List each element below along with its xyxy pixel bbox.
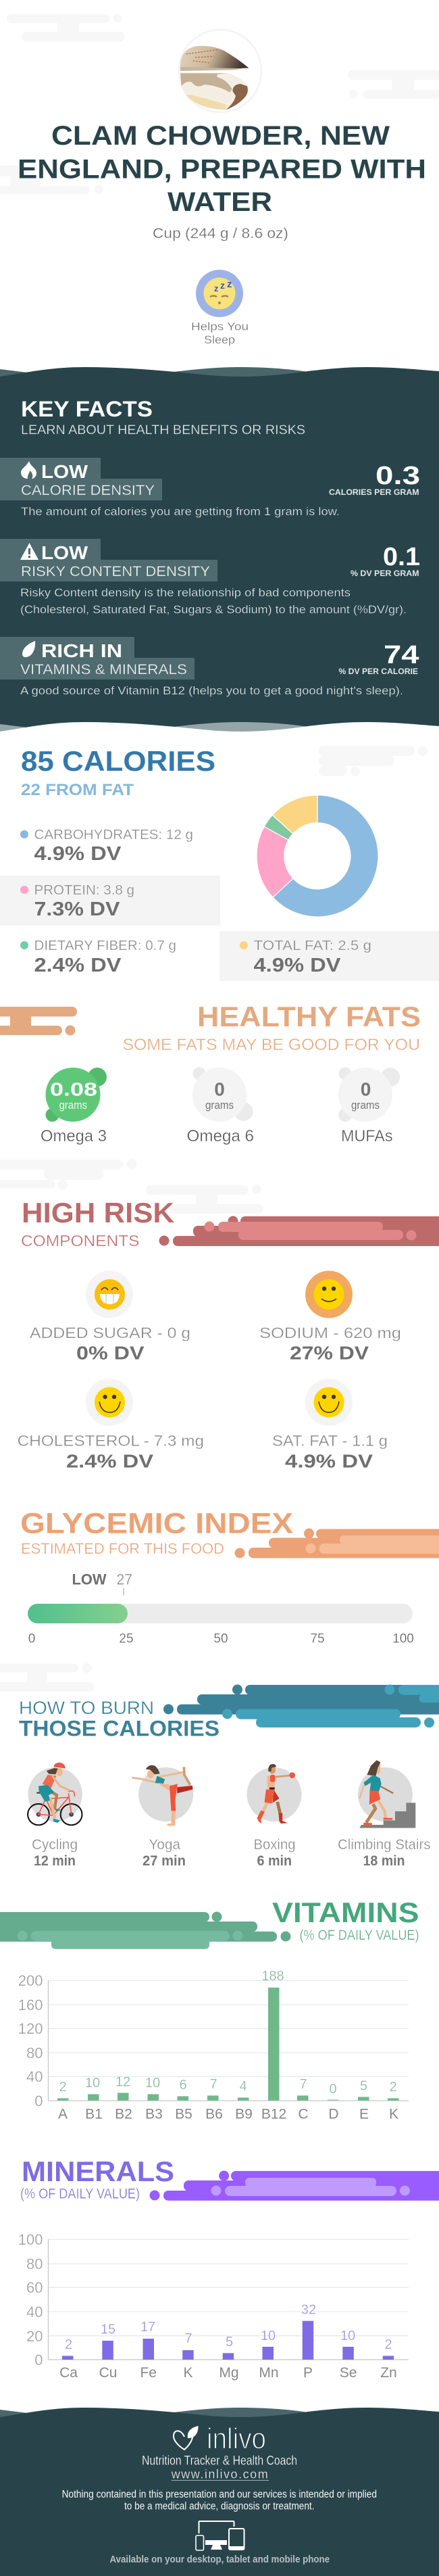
panel: footer <box>0 2408 439 2576</box>
icon: sleep face: z <box>214 283 219 293</box>
title: WATER <box>167 187 272 217</box>
bar chart: minerals: 2 <box>65 2337 72 2352</box>
caption: Climbing Stairs <box>338 1837 431 1853</box>
fact: rich in vitamins and minerals: A good source of Vitamin B12 (helps you to get a good night's sleep). <box>20 685 403 697</box>
heading: MINERALS <box>22 2155 174 2187</box>
availability note: Available on your desktop, tablet and mobile phone <box>109 2554 330 2565</box>
subheading: 22 FROM FAT <box>21 781 134 799</box>
bar chart: vitamins: B9 <box>235 2106 253 2122</box>
macro: total fat <box>220 931 439 981</box>
fact: risky content density: Risky Content density is the relationship of bad components <box>20 587 351 599</box>
gauge: 25 <box>119 1632 134 1646</box>
bar chart: minerals: Se <box>340 2365 357 2381</box>
disclaimer <box>62 2489 377 2512</box>
bar chart: minerals: Mg <box>219 2365 239 2381</box>
item: cholesterol: 2.4% DV <box>66 1451 153 1472</box>
bar chart: vitamins: 80 <box>26 2045 43 2061</box>
macro: dietary fiber: 2.4% DV <box>34 955 122 976</box>
gauge: LOW <box>72 1571 107 1588</box>
bar chart: minerals: Cu <box>99 2365 117 2381</box>
bar chart: vitamins: C <box>298 2106 309 2122</box>
activity: cycling: 12 min <box>34 1853 76 1869</box>
stat: omega 3 <box>41 1068 107 1145</box>
heading: KEY FACTS <box>21 397 153 421</box>
decoration <box>235 1528 439 1558</box>
activity: cycling <box>28 1763 82 1869</box>
fact: rich in vitamins and minerals: % DV PER CALORIE <box>339 667 418 676</box>
heading: HEALTHY FATS <box>197 1001 421 1032</box>
title: ENGLAND, PREPARED WITH <box>18 154 426 184</box>
gauge: 100 <box>392 1632 414 1646</box>
icon: leaf <box>22 641 35 657</box>
fact: calorie density: CALORIES PER GRAM <box>329 487 419 497</box>
panel: glycemic index <box>20 1508 439 1646</box>
macro: dietary fiber <box>20 938 176 976</box>
decoration <box>0 1007 77 1036</box>
bar chart: vitamins: B2 <box>115 2106 132 2122</box>
item: added sugar <box>30 1271 190 1363</box>
fact: calorie density: LOW <box>41 461 88 482</box>
bar chart: vitamins: 40 <box>26 2068 43 2085</box>
decoration <box>0 1912 290 1949</box>
serving size: Cup (244 g / 8.6 oz) <box>153 226 288 241</box>
icon: stair climber <box>358 1760 415 1828</box>
food image: clam <box>179 30 261 112</box>
activity: climbing stairs <box>338 1760 431 1869</box>
item: saturated fat: SAT. FAT - 1.1 g <box>272 1433 388 1450</box>
panel: high risk components <box>0 1159 439 1472</box>
item: cholesterol <box>18 1379 204 1472</box>
bar chart: vitamins: 200 <box>18 1972 43 1989</box>
gauge <box>28 1571 414 1646</box>
bar chart: minerals: 20 <box>26 2328 43 2345</box>
stat: omega 3: grams <box>59 1099 87 1112</box>
item: saturated fat: 4.9% DV <box>285 1451 373 1472</box>
bar chart: minerals: K <box>183 2365 193 2381</box>
stat: omega 3: Omega 3 <box>41 1127 107 1145</box>
title: CLAM CHOWDER, NEW <box>51 121 390 151</box>
bar chart: vitamins: B12 <box>261 2106 286 2122</box>
icon: smile orange <box>305 1271 353 1318</box>
bar chart: vitamins: B6 <box>205 2106 223 2122</box>
fact: calorie density: CALORIE DENSITY <box>21 483 155 498</box>
bar chart: vitamins: 2 <box>389 2080 397 2095</box>
macro: protein: PROTEIN: 3.8 g <box>34 883 134 898</box>
icon: sleep face: z <box>220 280 225 291</box>
bar chart: vitamins: D <box>328 2106 339 2122</box>
icon: sleep face <box>196 270 243 317</box>
icon: cyclist <box>28 1763 82 1825</box>
fact: rich in vitamins and minerals <box>0 637 419 697</box>
item: saturated fat <box>272 1379 388 1472</box>
bar chart: minerals: Ca <box>59 2365 78 2381</box>
bar chart: vitamins: B1 <box>85 2106 103 2122</box>
bar chart: minerals: 5 <box>226 2335 233 2350</box>
logo <box>174 2423 266 2456</box>
caption: Yoga <box>149 1837 180 1853</box>
bar chart: minerals: 17 <box>140 2320 155 2335</box>
fact: risky content density: % DV PER GRAM <box>351 569 419 578</box>
macro: carbohydrates: CARBOHYDRATES: 12 g <box>34 828 193 842</box>
disclaimer: Nothing contained in this presentation and our services is intended or implied <box>62 2489 377 2500</box>
macro: protein: 7.3% DV <box>34 899 120 920</box>
decoration <box>163 1685 439 1727</box>
subheading: (% OF DAILY VALUE) <box>300 1928 419 1943</box>
panel: healthy fats <box>0 1001 421 1145</box>
logo: inlivo <box>207 2423 266 2456</box>
gauge: 0 <box>28 1632 35 1646</box>
bar chart: minerals: Fe <box>140 2365 157 2381</box>
donut chart <box>257 795 378 917</box>
website: www.inlivo.com <box>171 2468 268 2481</box>
bar chart: vitamins: 2 <box>59 2080 67 2095</box>
macro: carbohydrates: 4.9% DV <box>34 843 122 865</box>
fact: risky content density <box>0 539 420 616</box>
fact: risky content density: LOW <box>41 542 88 563</box>
bar chart: vitamins: 188 <box>261 1969 284 1984</box>
stat: mufas: MUFAs <box>341 1127 393 1145</box>
gauge: 27 <box>116 1571 132 1588</box>
macro: carbohydrates <box>20 828 193 865</box>
caption: Cycling <box>32 1837 78 1853</box>
heading: 85 CALORIES <box>21 745 215 777</box>
macro: protein <box>0 876 220 926</box>
panel: calories <box>0 745 439 981</box>
stat: omega 6: Omega 6 <box>186 1127 254 1145</box>
stat: omega 6 <box>186 1067 254 1145</box>
decoration <box>150 2170 439 2201</box>
panel: key facts <box>0 367 439 740</box>
bar chart: minerals: 10 <box>340 2329 355 2343</box>
caption: Boxing <box>254 1837 296 1853</box>
fact: risky content density: 0.1 <box>383 543 420 571</box>
tagline: Nutrition Tracker & Health Coach <box>142 2454 297 2468</box>
stat: omega 6: 0 <box>214 1079 225 1099</box>
bar chart: vitamins: E <box>359 2106 369 2122</box>
heading <box>19 1698 220 1741</box>
stat: mufas <box>338 1067 400 1145</box>
decoration <box>159 1216 439 1246</box>
activity: climbing stairs: 18 min <box>363 1853 405 1869</box>
header section <box>0 14 439 346</box>
item: sodium: 27% DV <box>290 1343 369 1363</box>
gauge: 50 <box>213 1632 228 1646</box>
macro: total fat: 4.9% DV <box>254 955 341 976</box>
bar chart: minerals: 80 <box>26 2256 43 2272</box>
stat: omega 3: 0.08 <box>50 1079 97 1099</box>
stat: mufas: grams <box>351 1099 380 1112</box>
activity: boxing <box>247 1764 302 1869</box>
bar chart: minerals: 7 <box>184 2331 192 2346</box>
fact: calorie density: The amount of calories you are getting from 1 gram is low. <box>21 506 340 518</box>
fact: risky content density: (Cholesterol, Saturated Fat, Sugars & Sodium) to the amount (%DV/gr). <box>20 604 407 616</box>
macro: dietary fiber: DIETARY FIBER: 0.7 g <box>34 938 176 953</box>
stat: mufas: 0 <box>361 1079 371 1099</box>
bar chart: vitamins: 120 <box>18 2020 43 2037</box>
item: added sugar: 0% DV <box>76 1343 145 1363</box>
bar chart: minerals: 40 <box>26 2304 43 2320</box>
icon: boxer <box>247 1764 302 1823</box>
benefit label: Sleep <box>204 333 235 346</box>
panel: vitamins <box>0 1897 419 2122</box>
item: cholesterol: CHOLESTEROL - 7.3 mg <box>18 1433 204 1450</box>
panel: minerals <box>18 2155 439 2381</box>
bar chart: vitamins: 7 <box>299 2077 307 2092</box>
item: sodium <box>259 1271 401 1363</box>
fact: calorie density: 0.3 <box>376 462 420 490</box>
bar chart: minerals: 100 <box>18 2231 43 2248</box>
fact: calorie density <box>0 458 420 518</box>
bar chart: vitamins: K <box>389 2106 398 2122</box>
bar chart: vitamins: 10 <box>145 2076 160 2091</box>
fact: risky content density: RISKY CONTENT DENSITY <box>21 564 210 579</box>
bar chart: minerals: P <box>303 2365 313 2381</box>
heading: THOSE CALORIES <box>19 1717 220 1741</box>
bar chart: vitamins: 12 <box>115 2075 130 2090</box>
activity: yoga <box>132 1765 193 1869</box>
subheading: COMPONENTS <box>21 1232 139 1249</box>
subheading: (% OF DAILY VALUE) <box>20 2187 140 2202</box>
bar chart: vitamins: B5 <box>175 2106 192 2122</box>
fact: rich in vitamins and minerals: RICH IN <box>41 640 122 661</box>
bar chart: vitamins: 4 <box>239 2079 247 2094</box>
activity: boxing: 6 min <box>257 1853 292 1869</box>
bar chart: vitamins: 0 <box>34 2093 43 2109</box>
icon: flame <box>21 461 36 479</box>
item: added sugar: ADDED SUGAR - 0 g <box>30 1325 190 1341</box>
bar chart: vitamins <box>18 1969 409 2122</box>
icon: warning triangle <box>20 543 38 560</box>
heading: HOW TO BURN <box>19 1698 154 1718</box>
subheading: ESTIMATED FOR THIS FOOD <box>21 1540 224 1557</box>
icon: devices <box>196 2521 244 2550</box>
bar chart: minerals: 60 <box>26 2279 43 2296</box>
icon: smile <box>305 1379 353 1426</box>
bar chart: vitamins: 5 <box>360 2079 367 2094</box>
fact: rich in vitamins and minerals: VITAMINS & MINERALS <box>20 662 187 677</box>
item: sodium: SODIUM - 620 mg <box>259 1325 401 1341</box>
subheading: SOME FATS MAY BE GOOD FOR YOU <box>123 1036 420 1054</box>
bar chart: vitamins: 10 <box>85 2076 100 2091</box>
icon: sleep face: z <box>227 279 232 290</box>
heading: HIGH RISK <box>22 1197 174 1229</box>
heading: VITAMINS <box>272 1897 419 1928</box>
fact: rich in vitamins and minerals: 74 <box>384 641 419 669</box>
bar chart: vitamins: 6 <box>179 2078 187 2093</box>
heading: GLYCEMIC INDEX <box>20 1508 293 1540</box>
bar chart: vitamins: 0 <box>329 2082 337 2097</box>
icon: yoga pose <box>132 1765 193 1826</box>
bar chart: minerals: Mn <box>259 2365 279 2381</box>
stat: omega 6: grams <box>205 1099 234 1112</box>
bar chart: minerals: Zn <box>380 2365 397 2381</box>
benefit label: Helps You <box>191 320 249 333</box>
bar chart: vitamins: 7 <box>209 2077 217 2092</box>
bar chart: vitamins: 160 <box>18 1997 43 2013</box>
activity: yoga: 27 min <box>143 1853 186 1869</box>
bar chart: minerals: 2 <box>384 2337 392 2352</box>
macro: total fat: TOTAL FAT: 2.5 g <box>254 938 371 953</box>
bar chart: minerals <box>18 2231 409 2381</box>
icon: grin <box>86 1271 133 1318</box>
icon: smile <box>86 1379 133 1426</box>
benefit label <box>191 320 249 346</box>
gauge: 75 <box>310 1632 325 1646</box>
panel: how to burn those calories <box>0 1663 439 1869</box>
bar chart: minerals: 0 <box>34 2352 43 2368</box>
subheading: LEARN ABOUT HEALTH BENEFITS OR RISKS <box>21 423 305 437</box>
title <box>18 121 426 217</box>
bar chart: minerals: 15 <box>101 2322 115 2337</box>
bar chart: minerals: 32 <box>301 2303 316 2318</box>
bar chart: minerals: 10 <box>261 2329 276 2343</box>
disclaimer: to be a medical advice, diagnosis or treatment. <box>124 2501 315 2512</box>
bar chart: vitamins: A <box>58 2106 68 2122</box>
bar chart: vitamins: B3 <box>145 2106 163 2122</box>
